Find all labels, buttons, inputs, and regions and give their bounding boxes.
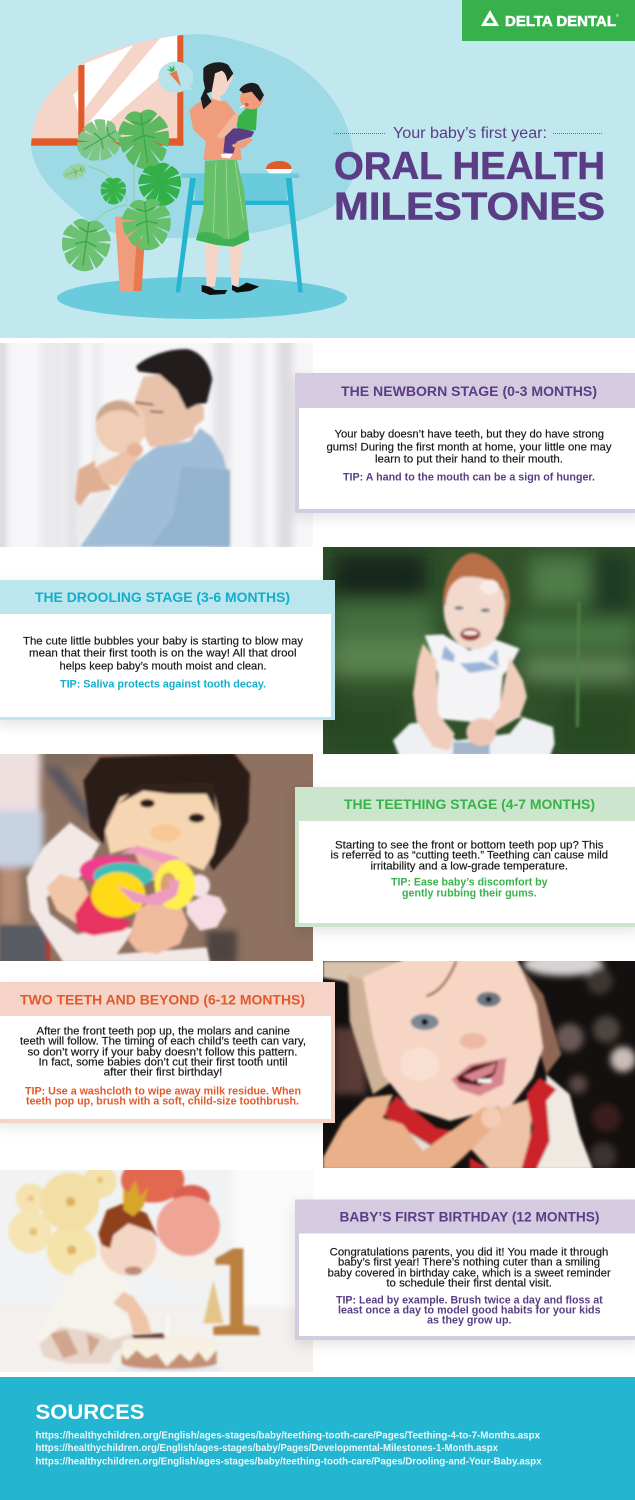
- card tip: gently rubbing their gums.: [402, 888, 537, 900]
- card heading: THE DROOLING STAGE (3-6 MONTHS): [35, 590, 290, 605]
- card body text: [23, 636, 304, 672]
- card body text: [326, 428, 612, 466]
- photo: father holding newborn: [0, 343, 300, 547]
- illustration: table, plant, mother and baby: [58, 62, 303, 295]
- card frame: [0, 982, 335, 1123]
- card body text: learn to put their hand to their mouth.: [375, 454, 563, 466]
- title: ORAL HEALTH: [334, 145, 605, 188]
- sources links: https://healthychildren.org/English/ages-stages/baby/Pages/Developmental-Milestones-1-Month.aspx: [36, 1443, 498, 1454]
- card body text: gums! During the first month at home, your little one may: [326, 442, 612, 454]
- sources links: https://healthychildren.org/English/ages-stages/baby/teething-tooth-care/Pages/Teething-4-to-7-Months.aspx: [36, 1430, 540, 1442]
- card: newborn stage: [295, 373, 635, 518]
- card body text: so don’t worry if your baby doesn’t follow this pattern.: [28, 1046, 298, 1058]
- card tip: TIP: Use a washcloth to wipe away milk residue. When: [25, 1086, 301, 1098]
- card: two teeth and beyond: [0, 982, 340, 1127]
- logo: Delta Dental: DELTA DENTAL: [505, 14, 616, 30]
- bowl of food: [266, 161, 293, 173]
- card tip: [336, 1294, 603, 1326]
- sources heading: SOURCES: [36, 1400, 144, 1424]
- card body text: [328, 1246, 611, 1290]
- logo: Delta Dental: ®: [616, 13, 619, 18]
- card body text: is referred to as “cutting teeth.” Teething can cause mild: [330, 850, 608, 862]
- card tip: least once a day to model good habits for your kids: [338, 1304, 601, 1316]
- photo: baby with first teeth: [323, 953, 635, 1169]
- mother and baby: [189, 62, 264, 295]
- hero blob: [31, 34, 355, 238]
- card tip: TIP: Lead by example. Brush twice a day and floss at: [336, 1294, 603, 1306]
- card tip: as they grow up.: [427, 1314, 512, 1326]
- card frame: [0, 580, 335, 720]
- card heading: TWO TEETH AND BEYOND (6-12 MONTHS): [20, 992, 305, 1008]
- card tip: teeth pop up, brush with a soft, child-size toothbrush.: [26, 1096, 299, 1108]
- photo: first birthday cake smash: [0, 1170, 313, 1372]
- subtitle: Your baby’s first year:: [393, 125, 547, 142]
- card body text: In fact, some babies don’t cut their first tooth until: [38, 1056, 288, 1068]
- sources links: [36, 1430, 542, 1468]
- logo: Delta Dental: [462, 0, 635, 41]
- card body text: Your baby doesn’t have teeth, but they do have strong: [334, 428, 604, 440]
- card body text: Starting to see the front or bottom teeth pop up? This: [335, 840, 604, 852]
- card frame: [295, 1200, 635, 1340]
- card tip: TIP: Saliva protects against tooth decay.: [60, 678, 266, 690]
- card body text: irritability and a low-grade temperature.: [370, 860, 568, 872]
- sources panel: [0, 1377, 635, 1500]
- photo: baby with teething toy: [0, 747, 313, 964]
- card tip: [25, 1086, 301, 1108]
- title: [334, 145, 605, 228]
- card: teething stage: [295, 787, 635, 932]
- card body text: [330, 840, 608, 872]
- card tip: TIP: Ease baby’s discomfort by: [391, 876, 548, 888]
- card body text: helps keep baby’s mouth moist and clean.: [60, 660, 266, 672]
- card body text: mean that their first tooth is on the way! All that drool: [29, 648, 296, 660]
- window: [27, 30, 183, 146]
- card tip: TIP: A hand to the mouth can be a sign of hunger.: [343, 472, 595, 484]
- table: [176, 173, 303, 292]
- card body text: baby covered in birthday cake, which is a sweet reminder: [328, 1268, 611, 1280]
- hero background: [0, 0, 635, 338]
- card heading: BABY’S FIRST BIRTHDAY (12 MONTHS): [340, 1210, 600, 1224]
- card body text: to schedule their first dental visit.: [386, 1278, 552, 1290]
- card frame: [295, 787, 635, 927]
- speech bubble: carrot: [158, 62, 194, 93]
- title: MILESTONES: [334, 186, 605, 228]
- monstera plant: [58, 107, 186, 274]
- card body text: baby’s first year! There’s nothing cuter than a smiling: [338, 1256, 600, 1268]
- plant pot: [115, 217, 144, 291]
- card: drooling stage: [0, 580, 340, 725]
- card body text: Congratulations parents, you did it! You made it through: [330, 1246, 608, 1258]
- floor ellipse: [57, 277, 347, 319]
- card: first birthday: [295, 1200, 635, 1345]
- card frame: [295, 373, 635, 513]
- card body text: After the front teeth pop up, the molars and canine: [36, 1026, 290, 1038]
- sources links: https://healthychildren.org/English/ages-stages/baby/teething-tooth-care/Pages/Drooling-and-Your-Baby.aspx: [36, 1456, 542, 1468]
- card tip: [391, 876, 548, 900]
- card body text: [20, 1026, 306, 1078]
- card body text: The cute little bubbles your baby is starting to blow may: [23, 636, 304, 648]
- photo: smiling baby on grass: [323, 547, 635, 757]
- card body text: teeth will follow. The timing of each child’s teeth can vary,: [20, 1036, 306, 1048]
- card heading: THE NEWBORN STAGE (0-3 MONTHS): [341, 384, 597, 399]
- card heading: THE TEETHING STAGE (4-7 MONTHS): [344, 797, 595, 812]
- card body text: after their first birthday!: [104, 1066, 222, 1078]
